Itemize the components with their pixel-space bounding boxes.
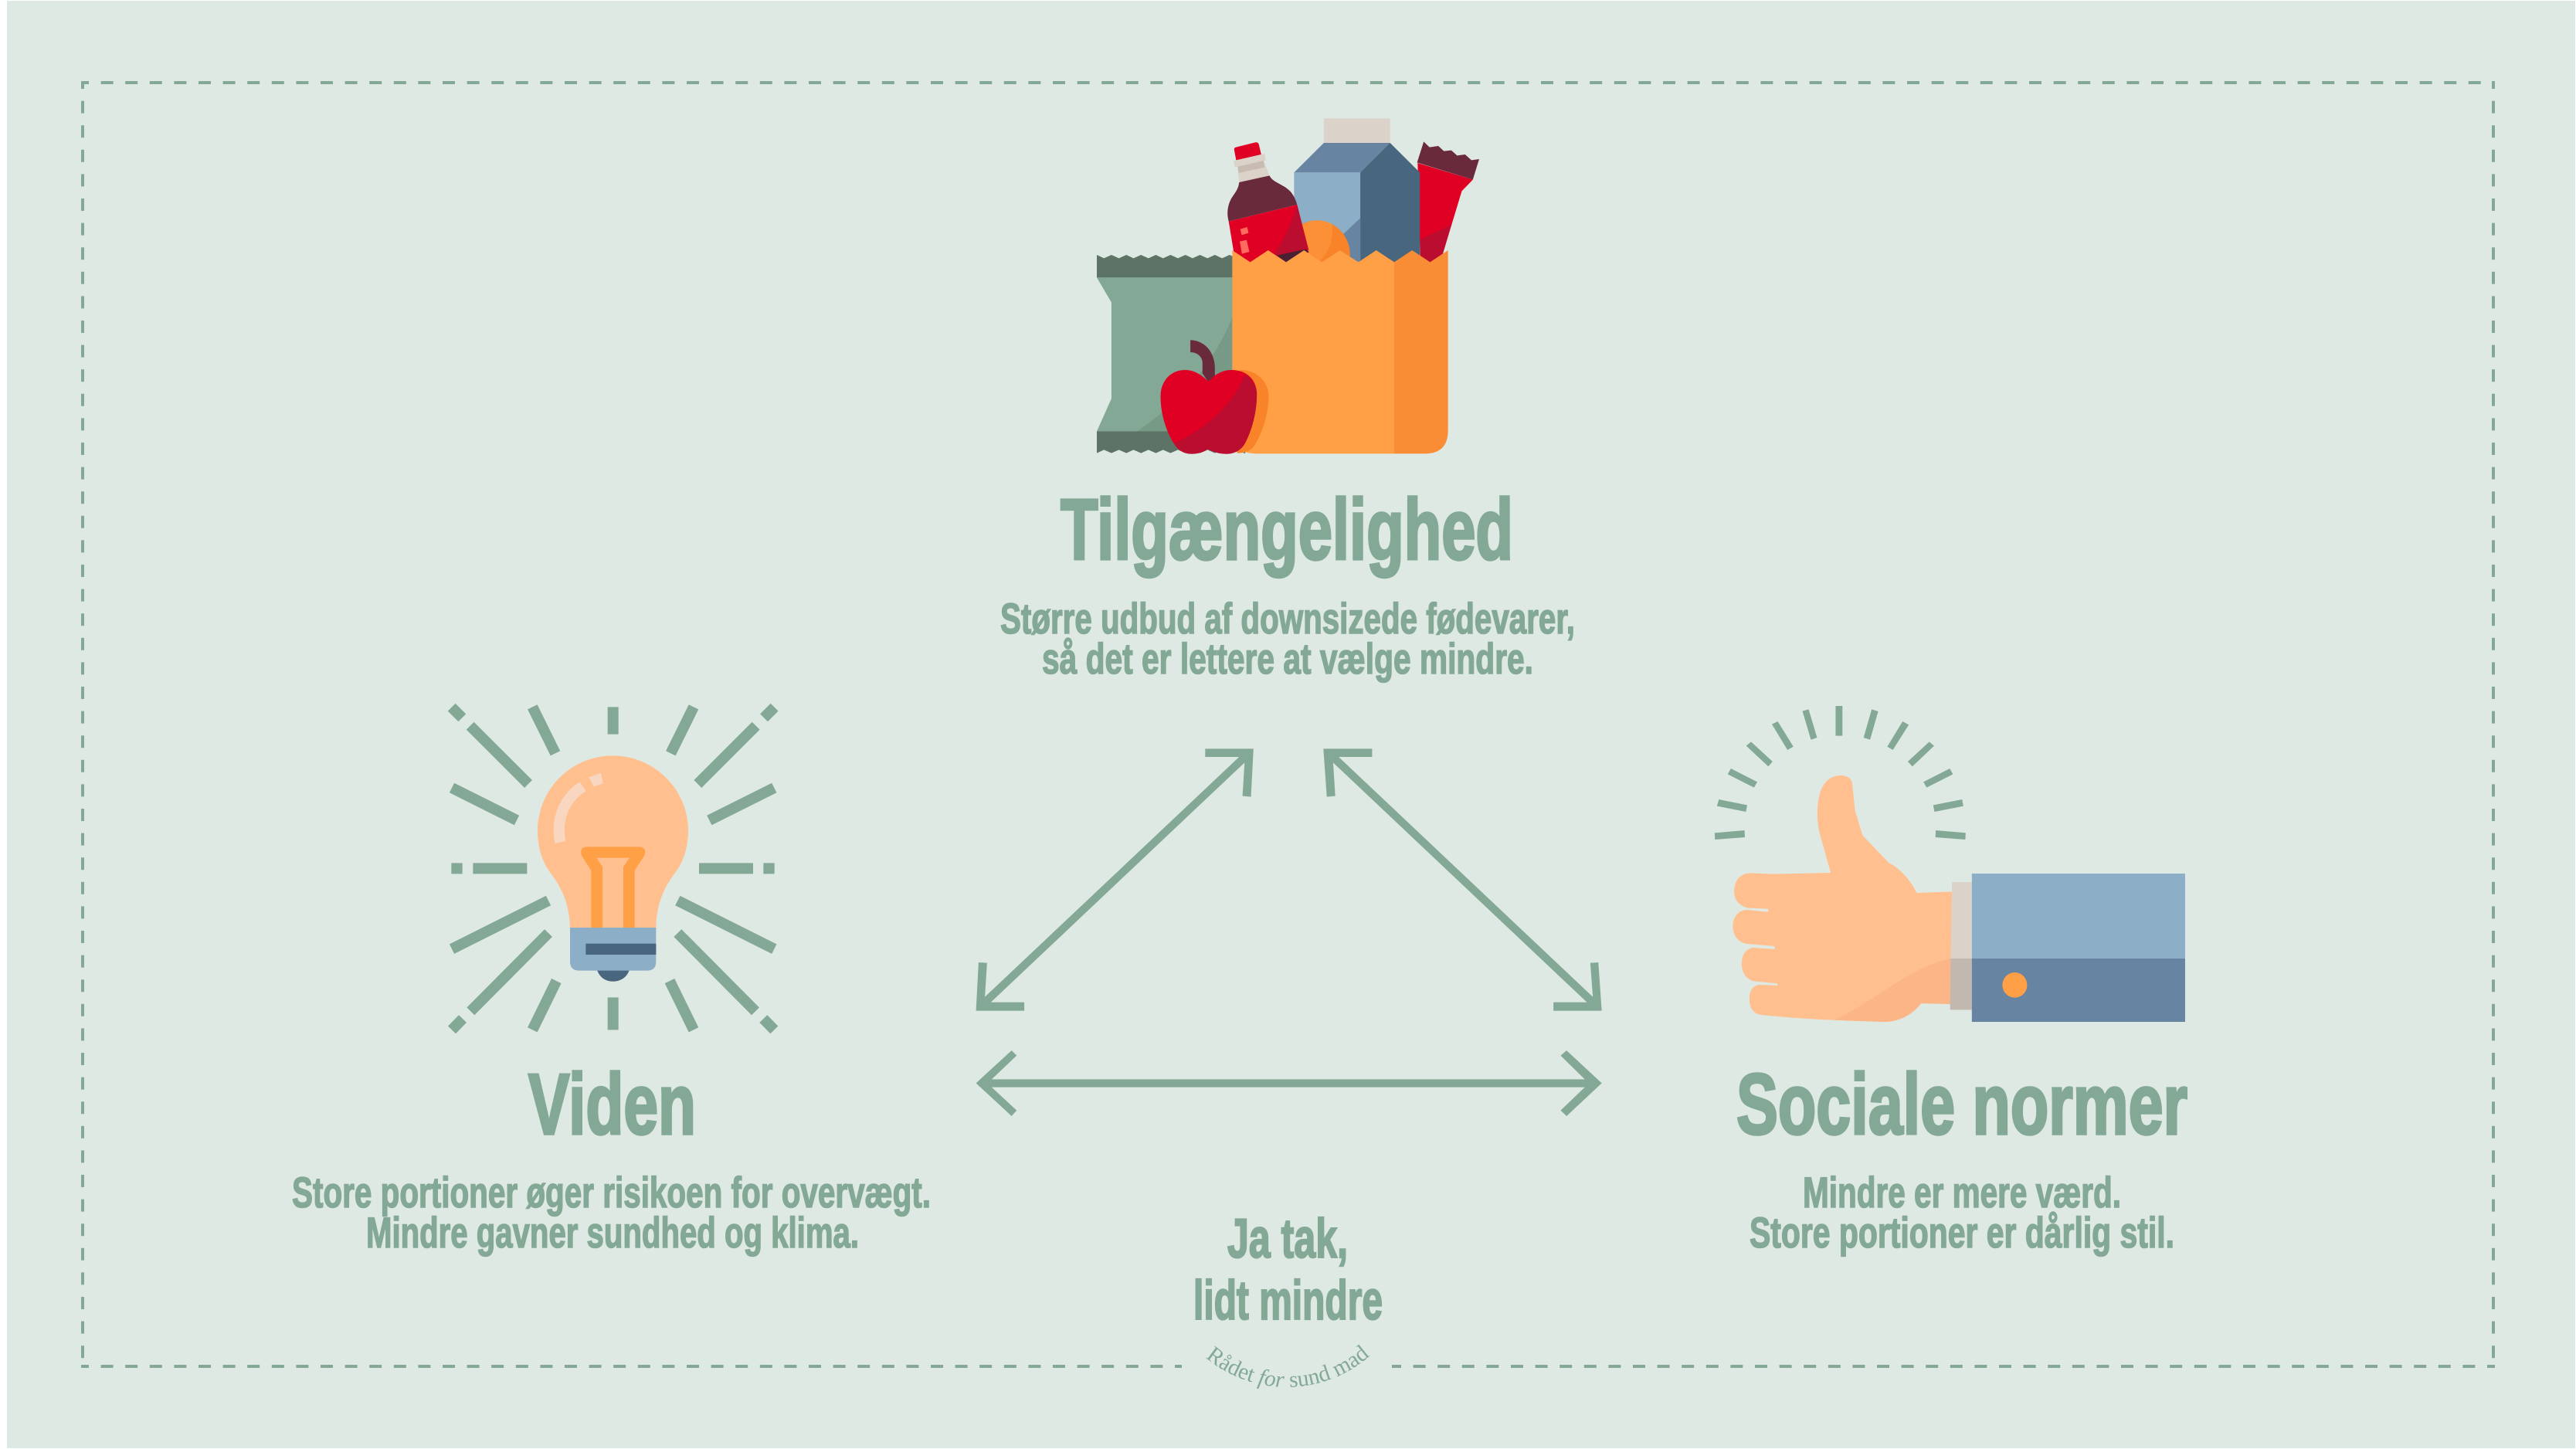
bulb base bbox=[570, 928, 656, 982]
arrow: Tilgængelighed to Sociale normer bbox=[1323, 748, 1602, 1011]
icon: grocery bag bbox=[1097, 118, 1479, 454]
heading: Sociale normer: Sociale normer bbox=[1736, 1057, 2187, 1152]
text: Tilgængelighed description: så det er lettere at vælge mindre. bbox=[1042, 634, 1533, 683]
orange bbox=[1284, 220, 1350, 290]
panel: Viden bbox=[292, 707, 931, 1257]
rays bbox=[451, 707, 775, 1030]
logo: Ja tak, lidt mindre: lidt mindre bbox=[1193, 1271, 1383, 1332]
candy bar bbox=[1417, 141, 1479, 263]
arrow: Viden to Tilgængelighed bbox=[976, 748, 1254, 1011]
curved text: Rådet for sund mad: Rådet for sund mad bbox=[1206, 1344, 1370, 1389]
shirt cuff bbox=[1950, 882, 1972, 1010]
text: Tilgængelighed description bbox=[1000, 594, 1575, 683]
cuff button bbox=[2002, 972, 2027, 998]
bulb glass bbox=[538, 755, 688, 929]
sleeve bbox=[1972, 874, 2185, 1022]
text: Sociale normer description: Mindre er mere værd. bbox=[1803, 1168, 2121, 1217]
panel: Sociale normer bbox=[1715, 706, 2187, 1257]
filament bbox=[581, 847, 645, 929]
rays bbox=[1715, 706, 1966, 840]
text: Viden description: Mindre gavner sundhed og klima. bbox=[366, 1208, 859, 1257]
logo: Ja tak, lidt mindre: Ja tak, bbox=[1227, 1209, 1348, 1270]
soda bottle bbox=[1227, 142, 1308, 263]
hand bbox=[1733, 775, 1953, 1022]
arrow: Viden to Sociale normer bbox=[976, 1050, 1602, 1116]
heading: Viden: Viden bbox=[528, 1057, 696, 1152]
text: Sociale normer description: Store portioner er dårlig stil. bbox=[1750, 1208, 2174, 1257]
icon: thumbs up with rays bbox=[1715, 706, 2185, 1022]
milk carton bbox=[1294, 118, 1420, 263]
text: Tilgængelighed description: Større udbud af downsizede fødevarer, bbox=[1000, 594, 1575, 643]
paper bag bbox=[1232, 250, 1448, 453]
panel: Tilgængelighed bbox=[1000, 118, 1575, 683]
text: Viden description bbox=[292, 1168, 931, 1257]
logo: Ja tak, lidt mindre bbox=[1193, 1209, 1383, 1389]
text: Viden description: Store portioner øger risikoen for overvægt. bbox=[292, 1168, 931, 1217]
icon: light bulb with rays bbox=[451, 707, 775, 1030]
arrows: triangle of double-headed arrows bbox=[976, 748, 1602, 1116]
text: Sociale normer description bbox=[1750, 1168, 2174, 1257]
highlights bbox=[554, 773, 603, 843]
heading: Tilgængelighed: Tilgængelighed bbox=[1061, 482, 1513, 578]
apple bbox=[1160, 340, 1268, 454]
green snack bag bbox=[1097, 255, 1245, 453]
